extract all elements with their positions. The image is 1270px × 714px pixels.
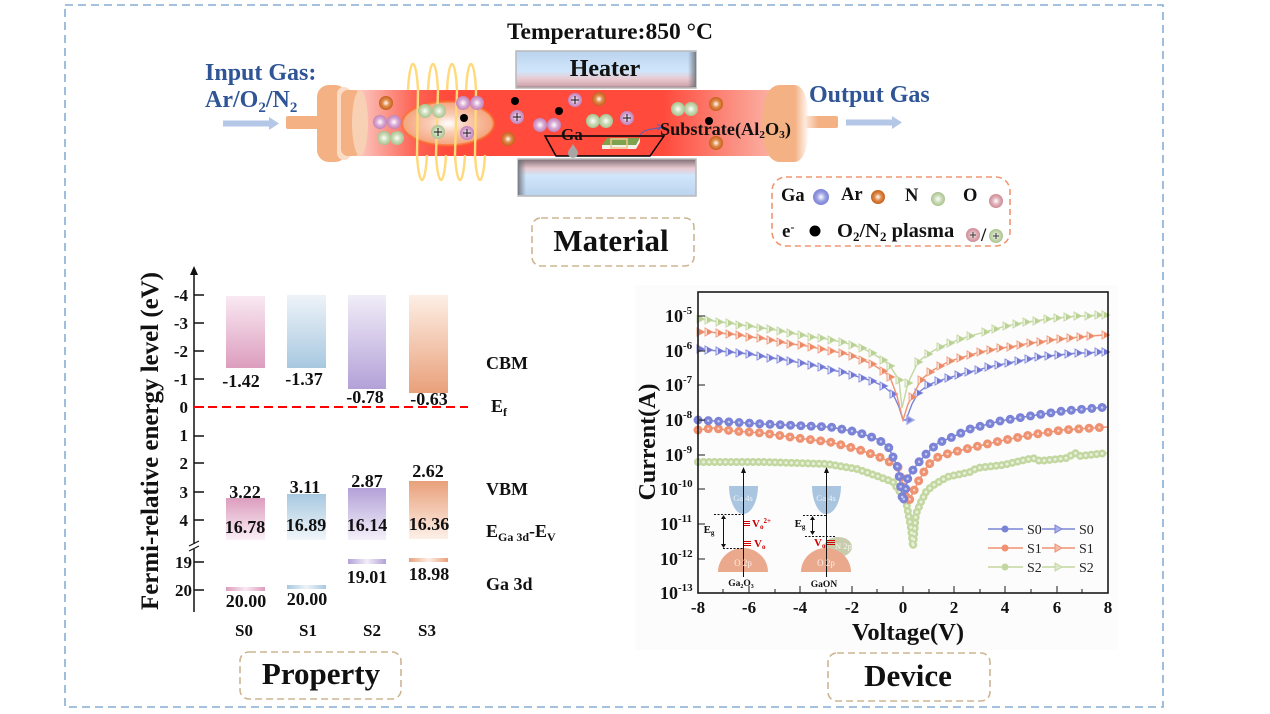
value labels: 16.14 [347,515,387,535]
label box: Device [828,653,990,701]
legend: species: 2 [853,229,859,244]
chart legend: S2 [1027,561,1042,576]
inset: band diagrams: o [760,523,764,531]
y tick labels: 3 [180,483,188,502]
inset: band diagrams: 3 [751,584,754,590]
legend: species: /N [858,220,880,242]
value labels: -0.63 [410,389,448,409]
inset: band diagrams: E [704,524,711,536]
y tick labels: 10 [660,549,678,569]
band labels: CBM [486,353,528,373]
y tick labels: -2 [174,342,188,361]
y tick labels: -5 [683,305,693,317]
y tick labels: 10 [660,514,678,534]
heater bottom [518,159,696,196]
band labels: -E [529,521,547,541]
value labels: 18.98 [409,564,449,584]
axis arrowhead [190,266,198,275]
arrow: output gas [846,116,902,129]
band labels: f [503,405,508,419]
x tick labels: -4 [793,598,808,617]
particles [373,92,723,150]
legend: species [772,177,1010,246]
y tick labels: -4 [174,286,188,305]
legend: species: Ga [781,186,805,206]
induction coil [408,64,485,180]
inset: band diagrams [704,467,852,590]
band labels: Ga 3d [486,574,533,594]
value labels: 3.11 [290,477,320,497]
y tick labels: -8 [683,409,693,421]
sample labels [235,621,436,640]
y tick labels [174,286,192,600]
sample labels: S3 [418,621,436,640]
value labels: -1.37 [285,369,323,389]
label box: Device: Device [864,658,952,693]
chart frame and ticks [698,292,1108,593]
y tick labels: -1 [174,370,188,389]
label: input gas: 2 [258,100,266,116]
chart legend: S1 [1027,542,1042,557]
sample labels: S0 [235,621,253,640]
curve: S1 dark [698,427,1107,503]
inset: band diagrams: g [802,523,806,531]
y tick labels: -6 [683,340,693,352]
y tick labels: 10 [665,375,683,395]
inset: band diagrams: O 2p [817,558,835,568]
y tick labels: 2 [180,454,188,473]
band labels: E [486,521,498,541]
y tick labels: 10 [660,479,678,499]
band labels [486,353,556,594]
chart legend: S0 [1027,523,1042,538]
x tick labels: 2 [950,598,958,617]
inset: band diagrams: O [743,579,751,589]
y tick labels: -9 [683,444,693,456]
curve: S2 light [700,315,1105,408]
legend: species: plasma [886,220,954,242]
label: substrate: 2 [759,129,766,141]
y tick labels: 0 [180,398,188,417]
label: substrate: ) [785,119,791,139]
inset: band diagrams: V [814,537,822,549]
label: input gas: Ar/O [205,87,258,113]
y tick labels: 1 [180,426,188,445]
inset: band diagrams: g [711,529,715,537]
legend: species: N [905,186,919,206]
value labels: -1.42 [222,371,260,391]
x tick labels: 8 [1104,598,1112,617]
legend: species: O [963,186,977,206]
chart legend [988,523,1094,576]
value labels: -0.78 [346,387,384,407]
legend: species: Ar [841,185,863,205]
Fermi level line [194,406,468,408]
chart legend: S1 [1079,542,1094,557]
inset: band diagrams: 2 [740,584,743,590]
y tick labels: 10 [665,445,683,465]
y tick labels [660,305,693,603]
band labels: V [547,530,556,544]
inset: band diagrams: GaON [811,580,837,590]
curve: S0 dark [698,407,1107,503]
right flange [762,85,838,162]
inset: band diagrams: Ga 4s [733,493,753,503]
chart legend: S0 [1079,523,1094,538]
x tick labels: -2 [845,598,859,617]
value labels: 2.62 [412,461,444,481]
y tick labels: 19 [175,553,192,572]
value labels: 16.36 [409,514,449,534]
value labels: 20.00 [287,589,327,609]
legend: species: / [980,225,987,246]
inset: band diagrams: o [822,542,826,550]
inset: band diagrams: Ga [728,579,740,589]
sample labels: S2 [363,621,381,640]
label box: Property: Property [262,656,381,691]
inset: band diagrams: o [762,543,766,551]
boat with substrate [545,124,664,158]
heater top: Heater [570,56,641,82]
y tick labels: 10 [660,583,678,603]
panel: energy level chart [137,266,556,640]
left flange [286,85,368,162]
y axis [194,272,204,612]
band labels: Ga 3d [498,530,529,544]
x tick labels: 0 [899,598,907,617]
label box: Property [240,652,401,699]
y tick labels: 10 [665,410,683,430]
label: substrate: O [765,119,779,139]
heater top [516,51,696,88]
y tick labels: 10 [665,341,683,361]
panel: I-V chart [635,285,1118,650]
value labels: 3.22 [229,482,261,502]
heading: temperature: Temperature:850 °C [507,19,713,44]
value labels: 16.89 [286,515,326,535]
inset: band diagrams: E [795,518,802,530]
sample labels: S1 [299,621,317,640]
y tick labels: 4 [180,511,188,530]
y tick labels: -3 [174,314,188,333]
y tick labels: -11 [678,513,692,525]
legend: species: - [790,220,794,234]
arrow: input gas [223,117,279,130]
inset: band diagrams: N 2p [835,541,852,551]
x tick labels: -6 [742,598,756,617]
curve: S0 light [700,349,1105,424]
x tick labels: 4 [1001,598,1010,617]
y tick labels: 10 [665,306,683,326]
label: output gas: Output Gas [809,82,930,108]
band labels: E [491,396,503,416]
quartz tube [345,90,790,156]
chart legend: S2 [1079,561,1094,576]
y tick labels: 20 [175,581,192,600]
y tick labels: -12 [678,548,693,560]
label: input gas: Input Gas: [205,60,316,86]
value labels [222,369,449,611]
inset: band diagrams: V [754,538,762,550]
value labels: 19.01 [347,567,387,587]
y tick labels: -13 [678,582,693,594]
y axis title: Fermi-relative energy level (eV) [137,272,164,610]
x tick labels: -8 [691,598,705,617]
plasma glow [402,102,494,146]
label: input gas: /N [265,87,290,113]
conduction band bars [226,295,448,393]
label box: Material: Material [553,223,669,258]
inset: band diagrams: Ga 4s [816,493,836,503]
value labels: 2.87 [351,471,383,491]
label: substrate: 3 [779,129,785,141]
x tick labels [691,598,1112,617]
label box: Material [532,218,694,266]
valence band bars [226,481,448,540]
x axis title: Voltage(V) [852,619,964,646]
inset: band diagrams: O 2p [734,558,752,568]
chart background [635,285,1118,650]
legend: species: 2 [880,229,886,244]
panel: material furnace diagram [205,19,930,196]
label: substrate: Substrate(Al [660,119,755,139]
legend: species: O [837,220,853,242]
inset: band diagrams: 2+ [763,517,771,525]
label: input gas [205,60,316,116]
x tick labels: 6 [1053,598,1061,617]
curve: S1 light [700,332,1105,420]
y tick labels: -7 [683,374,693,386]
curve: S2 dark [698,453,1107,547]
legend: species: e [782,221,790,242]
y tick labels: -10 [678,478,693,490]
y axis title: Current(A) [635,384,661,500]
value labels: 20.00 [226,591,266,611]
label: input gas: 2 [290,100,297,116]
Ga 3d bars [226,558,448,591]
band labels: VBM [486,479,528,499]
inset: band diagrams: V [752,518,760,530]
axis break [189,541,201,551]
value labels: 16.78 [225,517,265,537]
boat with substrate: Ga [561,125,583,144]
